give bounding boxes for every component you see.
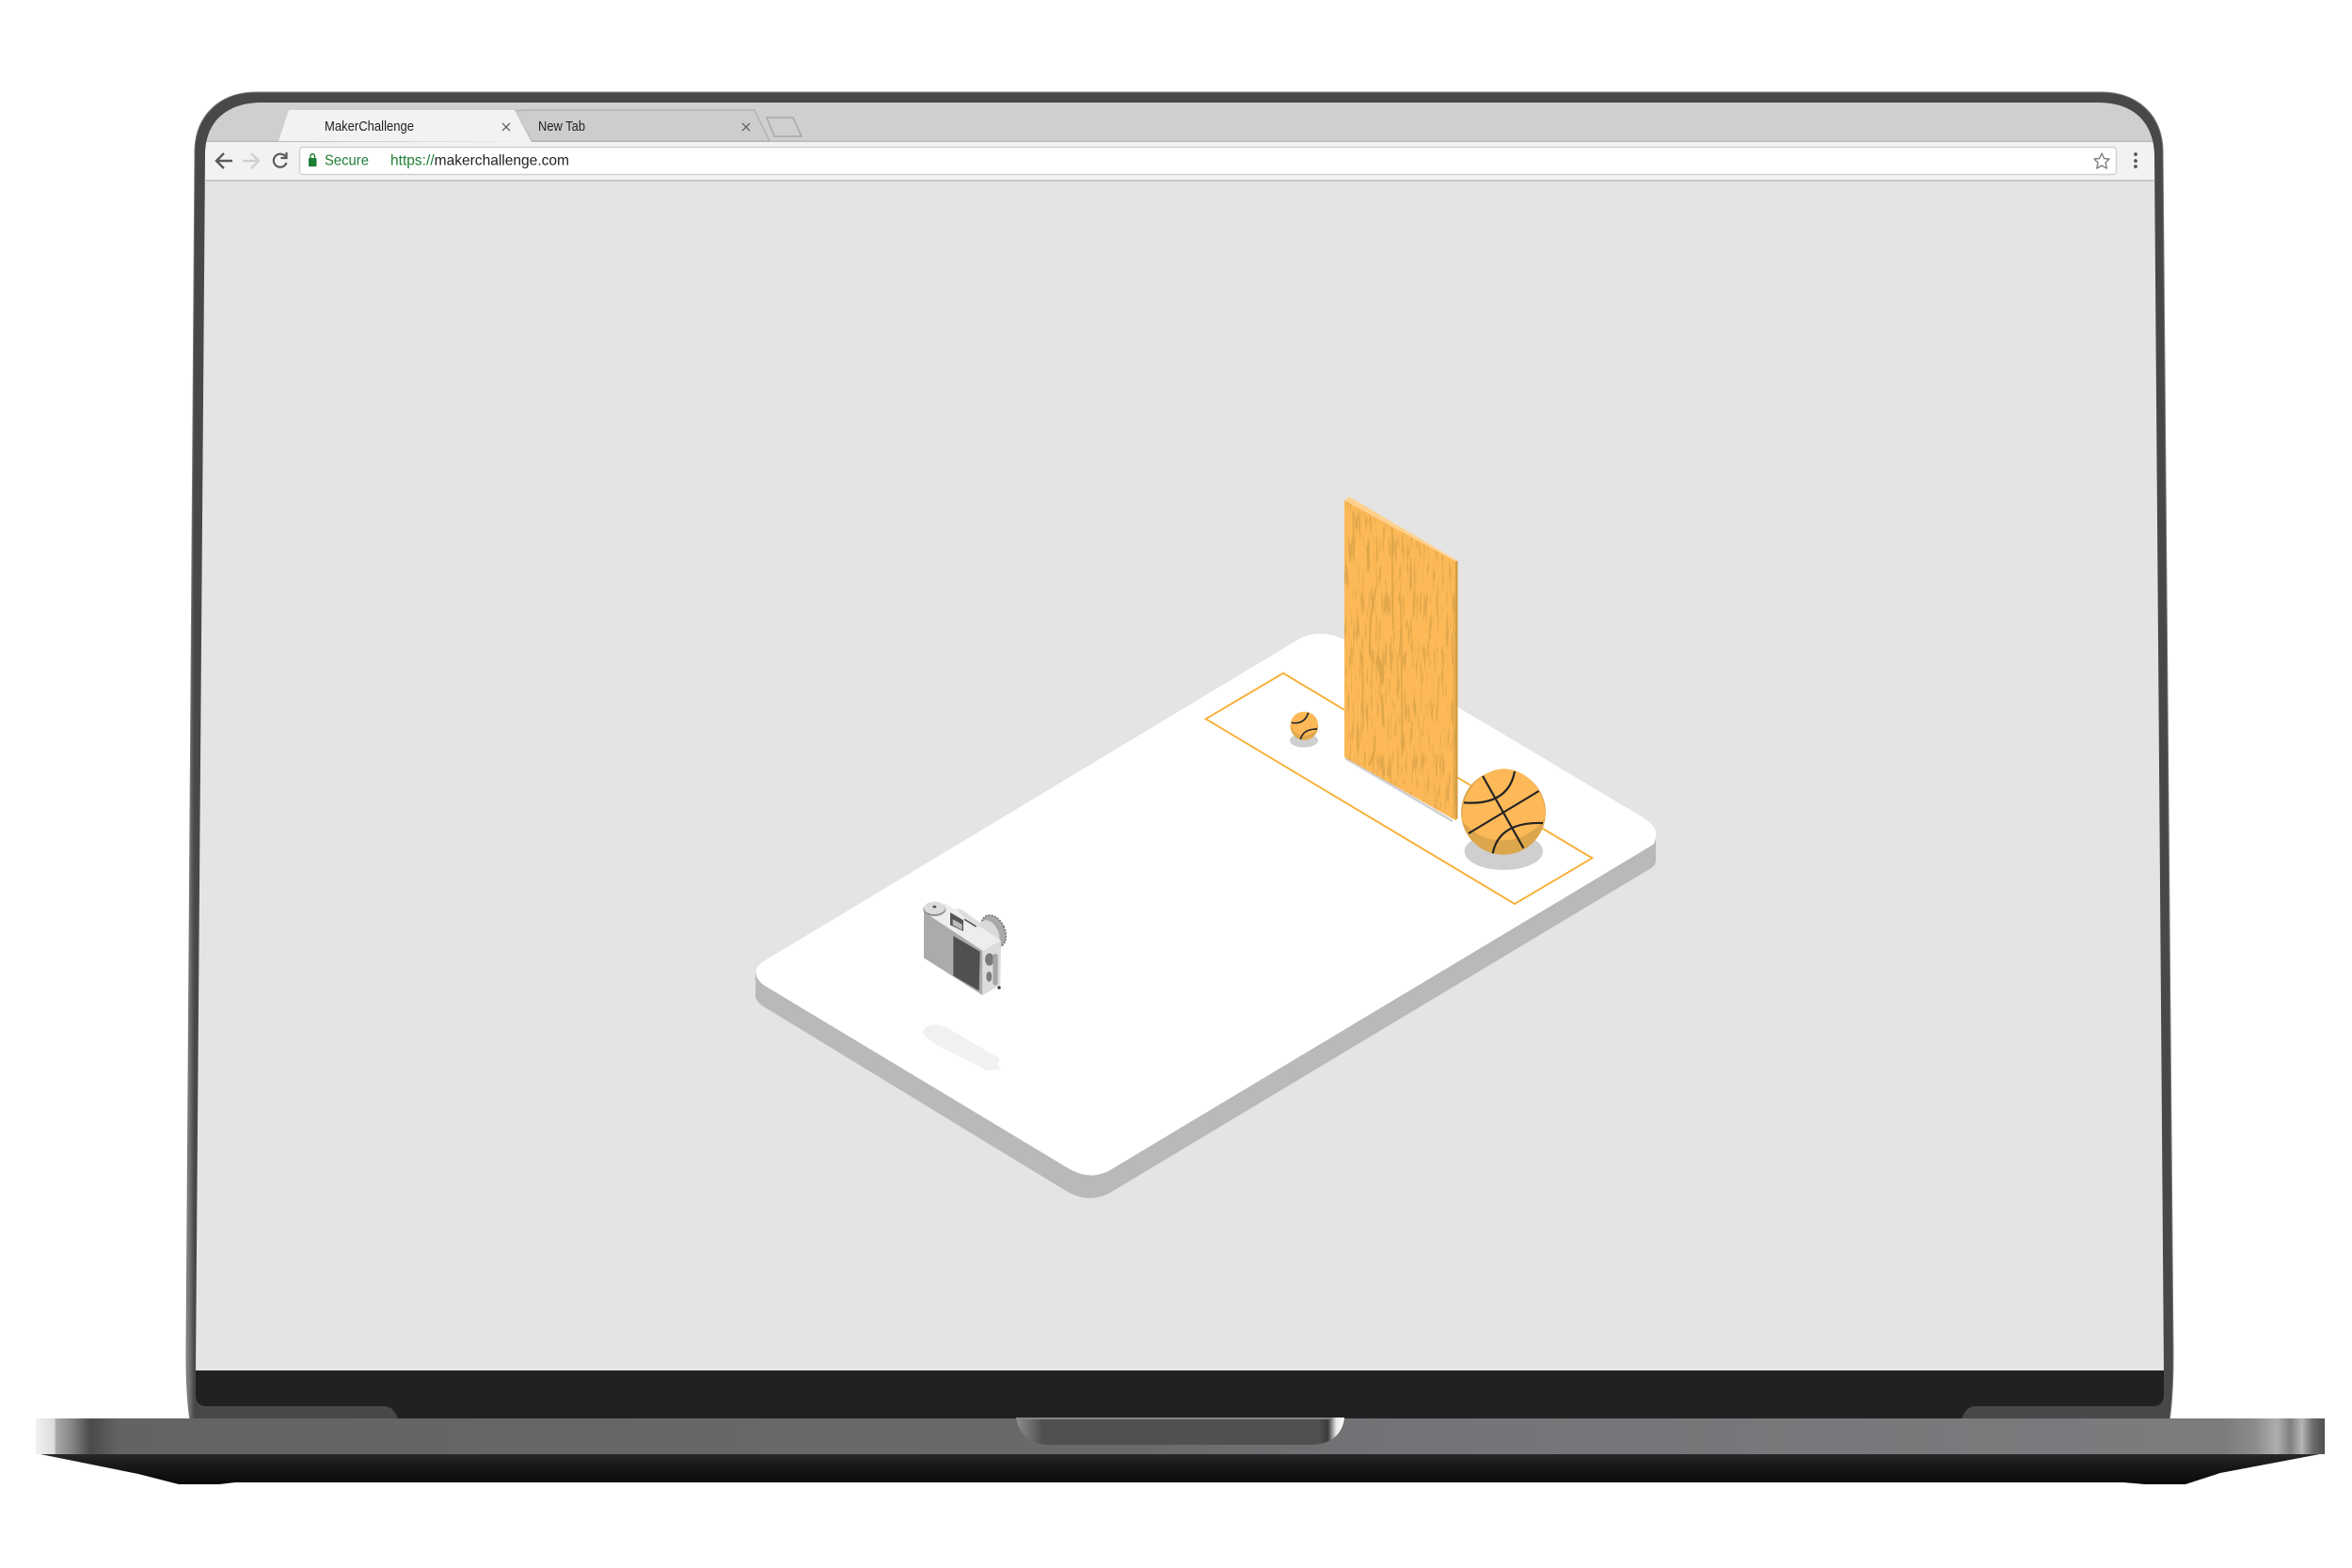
orange outline rectangle xyxy=(1206,673,1592,904)
small ball seams xyxy=(1292,713,1317,739)
camera top face xyxy=(925,904,1001,951)
camera xyxy=(923,902,1010,1071)
camera top dial xyxy=(923,902,946,916)
camera front face xyxy=(924,911,982,995)
icon: secure lock xyxy=(309,154,316,166)
board front face xyxy=(1344,497,1456,822)
icon: forward arrow xyxy=(243,153,259,168)
board top edge xyxy=(1344,497,1457,563)
basketball lit area xyxy=(1462,768,1545,840)
webcam bezel strip xyxy=(196,1370,2164,1419)
basketball xyxy=(1461,768,1546,870)
camera dark panel xyxy=(953,936,980,990)
platform xyxy=(755,634,1656,1198)
wood grain streaks xyxy=(1353,511,1456,818)
icon: reload xyxy=(274,152,286,167)
notch top highlight xyxy=(1020,1418,1330,1419)
secure label: Secure xyxy=(325,152,369,169)
tab label: New Tab: New Tab xyxy=(538,119,585,135)
tab label: MakerChallenge: MakerChallenge xyxy=(325,119,414,135)
toolbar xyxy=(188,141,2173,181)
camera side face xyxy=(982,941,1001,995)
wooden board xyxy=(1344,497,1458,822)
small ball highlight xyxy=(1291,712,1318,736)
inactive tab: New Tab xyxy=(515,110,770,141)
basketball seams xyxy=(1464,771,1543,853)
basketball body xyxy=(1461,770,1546,855)
small ball body xyxy=(1290,712,1318,740)
laptop base underside xyxy=(36,1453,2325,1484)
trackpad notch xyxy=(1016,1418,1344,1445)
camera lens xyxy=(976,911,1010,951)
small ball xyxy=(1290,712,1318,748)
new tab button xyxy=(767,118,802,136)
camera viewfinder xyxy=(950,912,976,931)
laptop lid frame xyxy=(186,92,2173,1420)
small ball shadow xyxy=(1290,734,1318,748)
camera strap bar xyxy=(955,909,983,928)
URL text: https://makerchallenge.com xyxy=(390,152,569,169)
basketball shadow xyxy=(1465,832,1543,870)
icon: menu dots xyxy=(2134,152,2137,168)
toolbar bottom border xyxy=(188,180,2173,182)
close icon: MakerChallenge xyxy=(502,123,510,131)
icon: back arrow xyxy=(216,153,232,168)
board shadow xyxy=(1345,758,1453,821)
active tab: MakerChallenge xyxy=(278,110,532,142)
browser window xyxy=(188,99,2173,1375)
screen background xyxy=(188,181,2173,1375)
platform top surface xyxy=(756,634,1656,1176)
camera reflection xyxy=(923,1024,1000,1071)
laptop base front xyxy=(36,1418,2325,1454)
board right edge xyxy=(1455,561,1458,820)
close icon: New Tab xyxy=(742,123,750,131)
tab strip xyxy=(207,103,2153,141)
address bar xyxy=(299,147,2117,175)
camera side dial xyxy=(985,953,1001,990)
icon: bookmark star xyxy=(2094,153,2109,168)
wood base colour xyxy=(1344,497,1455,822)
tab strip bottom border xyxy=(188,141,2173,142)
wood grain noise xyxy=(1344,497,1455,822)
platform side thickness xyxy=(755,835,1656,1198)
